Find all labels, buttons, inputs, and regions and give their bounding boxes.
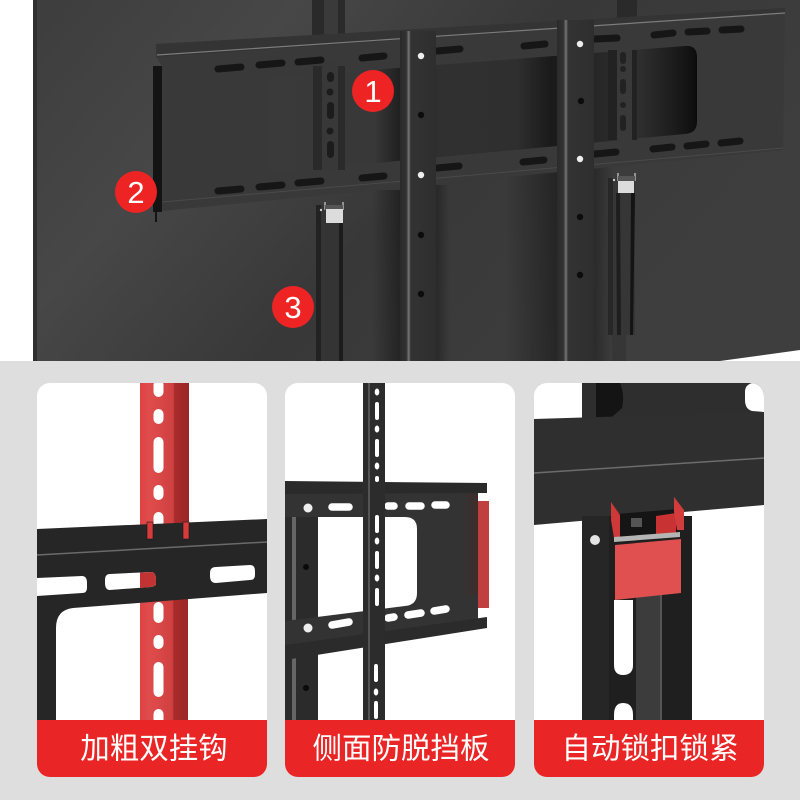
badge 2 (115, 171, 157, 213)
panel: side anti-slip baffle (285, 383, 515, 720)
rail highlight (37, 542, 267, 555)
badge 3: 3 (284, 290, 302, 325)
bracket rail highlight (157, 13, 785, 55)
bracket top band (292, 493, 417, 517)
right hanging strip top (617, 0, 637, 18)
black bracket (37, 519, 267, 725)
caption band 3: 自动锁扣锁紧 (561, 732, 739, 766)
panel: thickened double hooks (37, 383, 267, 720)
caption band 2 (285, 720, 515, 777)
bracket top rail (285, 481, 487, 494)
left column (285, 517, 318, 720)
bracket bottom lip (162, 148, 783, 202)
red side plate (478, 501, 489, 608)
bracket shadow and side plate (153, 66, 162, 222)
caption band 1: 加粗双挂钩 (80, 732, 228, 766)
upright column 1 (400, 31, 436, 361)
lower right strip (605, 178, 635, 361)
TV left edge (33, 0, 37, 361)
bracket slots (37, 565, 255, 596)
window cut-out (267, 46, 697, 172)
column shadows (372, 165, 614, 361)
red lock buckle (611, 497, 684, 600)
upright column 2 (557, 20, 594, 361)
vertical strip (363, 383, 385, 725)
panel: automatic lock (534, 383, 764, 720)
caption band 2: 侧面防脱挡板 (312, 732, 490, 766)
vertical strip (582, 516, 692, 725)
bracket plate (156, 8, 785, 211)
left hanging strip (312, 0, 345, 361)
TV back panel (33, 0, 800, 361)
upper plate (582, 383, 764, 418)
badge 1 (352, 70, 394, 112)
white slots (332, 505, 446, 625)
hero: TV back with mounting bracket (33, 0, 800, 361)
badge 1: 1 (364, 74, 382, 109)
bracket rail lip (156, 8, 785, 57)
badge 3 (272, 286, 314, 328)
red hanging strip (140, 380, 189, 729)
badge 2: 2 (127, 175, 145, 210)
bracket slots (218, 29, 741, 191)
caption band 3 (534, 720, 764, 777)
lock clip right (613, 173, 635, 193)
hook tabs (147, 522, 189, 539)
bracket rail (534, 412, 764, 525)
bracket bottom band (285, 593, 478, 646)
bracket right plate (417, 493, 478, 600)
caption band 1 (37, 720, 267, 777)
window corner (406, 517, 417, 528)
vertical strip in window (313, 50, 637, 170)
bracket bottom rail (285, 617, 487, 660)
lock clip left (320, 202, 343, 223)
